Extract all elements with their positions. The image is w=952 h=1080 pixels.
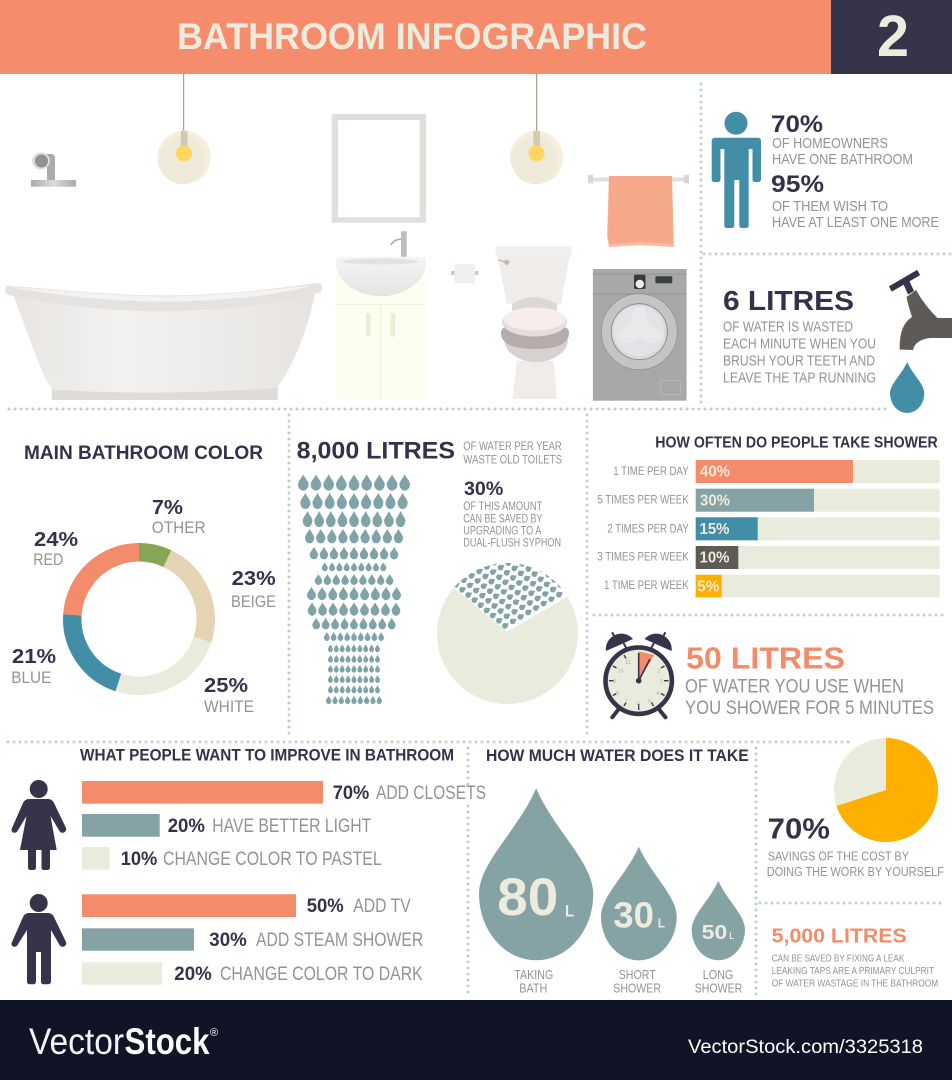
- icon: alarm clock: 10: [617, 668, 624, 674]
- label: other: OTHER: [152, 518, 206, 537]
- icon: alarm clock: 8: [616, 691, 619, 697]
- bar chart: 30%: [700, 492, 730, 509]
- bar chart: 1 TIME PER WEEK: [604, 580, 689, 592]
- bar chart: 10%: [700, 550, 730, 567]
- bar chart: women: 20%: [168, 816, 205, 837]
- label: red: 24%: [34, 529, 78, 551]
- bar chart: 3 TIMES PER WEEK: [597, 552, 689, 564]
- label: red: [33, 529, 78, 569]
- stat: 30 percent: UPGRADING TO A: [463, 525, 542, 537]
- icon: alarm clock: 6: [637, 702, 640, 708]
- bar chart: men: 50%: [307, 896, 344, 917]
- bar chart: 5 TIMES PER WEEK: [597, 495, 689, 507]
- text block: [723, 320, 876, 387]
- bar chart: men: ADD STEAM SHOWER: [256, 929, 423, 951]
- panel: 70 percent savings: [767, 738, 944, 879]
- stat: 70%: [768, 813, 830, 845]
- drop: long shower: [692, 881, 745, 996]
- label: blue: 21%: [12, 646, 56, 668]
- drop: long shower: SHOWER: [695, 981, 742, 996]
- drop: short shower: SHOWER: [613, 981, 661, 996]
- panel: how often do people take shower: [597, 435, 940, 597]
- stat: 70 percent: OF HOMEOWNERS: [772, 136, 888, 152]
- text block: [463, 439, 562, 466]
- heading: 6 LITRES: [723, 285, 854, 316]
- bathtub: [5, 283, 322, 400]
- label: white: [204, 675, 254, 716]
- stat: 30 percent: OF THIS AMOUNT: [463, 501, 542, 513]
- bathroom scene illustration: [5, 74, 689, 401]
- bar chart: women: [82, 781, 486, 870]
- drop: long shower: LONG: [703, 967, 733, 982]
- label: blue: BLUE: [11, 668, 51, 687]
- panel: 5,000 litres: [772, 925, 938, 989]
- pie chart: [834, 738, 938, 842]
- text block: BRUSH YOUR TEETH AND: [723, 354, 875, 370]
- icon: alarm clock: 3: [660, 679, 663, 685]
- image id: VectorStock.com/3325318: [688, 1037, 923, 1058]
- registered mark: ®: [210, 1027, 218, 1039]
- logo text: [29, 1021, 210, 1062]
- icon: person: [712, 112, 761, 228]
- bar chart: women: 10%: [121, 849, 157, 870]
- bar chart: men: 30%: [209, 930, 247, 951]
- bar chart: men: CHANGE COLOR TO DARK: [220, 963, 423, 985]
- stat: 70 percent: [771, 111, 913, 168]
- bar chart: women: 70%: [333, 783, 369, 804]
- towel on rail: [588, 175, 689, 247]
- bar chart: men: [82, 894, 423, 985]
- vanity unit with basin: [336, 231, 426, 399]
- washing machine: [593, 269, 687, 401]
- bar chart: women: ADD CLOSETS: [376, 782, 486, 804]
- title: BATHROOM INFOGRAPHIC: [177, 16, 647, 57]
- bar chart: women: CHANGE COLOR TO PASTEL: [163, 848, 382, 870]
- chart: toilet made of water drops: [298, 474, 410, 704]
- bar chart: 2 TIMES PER DAY: [607, 523, 689, 535]
- stat: 30 percent: DUAL-FLUSH SYPHON: [463, 537, 561, 549]
- heading: 5,000 LITRES: [772, 925, 907, 948]
- label: other: [152, 497, 206, 537]
- text block: CAN BE SAVED BY FIXING A LEAK: [772, 953, 904, 965]
- label: white: 25%: [204, 675, 248, 697]
- text block: EACH MINUTE WHEN YOU: [723, 337, 876, 353]
- toilet: [496, 246, 571, 399]
- label: beige: 23%: [232, 568, 276, 590]
- drop: short shower: [601, 847, 677, 996]
- toilet paper: [451, 264, 478, 283]
- icon: alarm clock: 11: [625, 660, 631, 666]
- pie chart with drops: [437, 563, 578, 704]
- page number: 2: [877, 4, 909, 69]
- drop: taking bath: 80: [497, 868, 558, 927]
- panel: homeowners statistics: [712, 111, 939, 231]
- drop: long shower: 50: [702, 921, 727, 944]
- text block: [685, 676, 934, 719]
- panel: 8,000 litres toilets: [297, 437, 580, 704]
- panel: what people want to improve: [11, 746, 486, 985]
- drop: short shower: SHORT: [619, 967, 656, 982]
- donut chart: [72, 552, 206, 686]
- drop: taking bath: TAKING: [514, 967, 553, 982]
- icon: alarm clock: 2: [657, 668, 661, 674]
- panel: 6 litres tap: [723, 270, 952, 413]
- icon: tap: [890, 270, 952, 350]
- footer watermark bar: [0, 1000, 952, 1080]
- heading: 8,000 LITRES: [297, 437, 455, 464]
- stat: 30 percent: 30%: [464, 479, 503, 500]
- bar chart: 1 TIME PER DAY: [613, 466, 689, 478]
- lamp left: [157, 74, 211, 184]
- heading: 50 LITRES: [686, 640, 845, 675]
- icon: man: [11, 894, 66, 984]
- stat: 95 percent: [771, 171, 939, 231]
- icon: alarm clock: 9: [613, 679, 616, 685]
- icon: alarm clock: 7: [625, 699, 628, 705]
- bar chart: women: HAVE BETTER LIGHT: [212, 815, 371, 837]
- label: red: RED: [33, 550, 63, 569]
- icon: alarm clock: [606, 633, 672, 717]
- stat: 70 percent: 70%: [771, 111, 823, 138]
- stat: 95 percent: OF THEM WISH TO: [772, 199, 888, 215]
- panel: how much water does it take: [479, 747, 749, 996]
- mirror: [332, 114, 426, 223]
- bar chart: men: 20%: [174, 964, 212, 985]
- label: beige: [231, 568, 276, 611]
- drop: short shower: L: [658, 916, 665, 931]
- panel: 50 litres shower: [606, 633, 934, 719]
- text block: [767, 848, 944, 879]
- heading: MAIN BATHROOM COLOR: [24, 443, 263, 464]
- text block: SAVINGS OF THE COST BY: [768, 848, 909, 863]
- header banner: [0, 0, 952, 74]
- shower head: [31, 152, 76, 187]
- drop: taking bath: L: [565, 902, 574, 921]
- heading: HOW MUCH WATER DOES IT TAKE: [486, 747, 749, 765]
- bar chart: 15%: [700, 521, 730, 538]
- bar chart: men: ADD TV: [353, 895, 411, 917]
- text block: OF WATER YOU USE WHEN: [685, 676, 904, 698]
- stat: 95 percent: 95%: [771, 171, 824, 198]
- text block: LEAVE THE TAP RUNNING: [723, 371, 876, 387]
- label: blue: [11, 646, 56, 687]
- stat: 30 percent: [463, 479, 561, 549]
- label: beige: BEIGE: [231, 592, 276, 611]
- logo text: Stock: [124, 1021, 210, 1062]
- stat: 70 percent: HAVE ONE BATHROOM: [772, 152, 913, 168]
- text block: WASTE OLD TOILETS: [463, 452, 562, 466]
- text block: OF WATER IS WASTED: [723, 320, 853, 336]
- bar chart: 40%: [700, 464, 730, 481]
- text block: [772, 953, 938, 989]
- drop: long shower: L: [729, 931, 734, 942]
- bar chart: 5%: [697, 578, 719, 595]
- label: white: WHITE: [204, 697, 254, 716]
- icon: woman: [11, 780, 66, 870]
- bar chart: [597, 460, 940, 597]
- panel: main bathroom color: [11, 443, 276, 716]
- icon: alarm clock: 4: [656, 691, 660, 697]
- logo text: Vector: [29, 1021, 124, 1062]
- icon: water drop: [890, 362, 924, 413]
- stat: 30 percent: CAN BE SAVED BY: [463, 513, 543, 525]
- text block: OF WATER PER YEAR: [463, 439, 562, 453]
- drop: taking bath: BATH: [519, 981, 547, 996]
- lamp right: [510, 74, 563, 184]
- label: other: 7%: [152, 497, 183, 519]
- drop: short shower: 30: [613, 895, 654, 936]
- drop: taking bath: [479, 788, 593, 996]
- heading: WHAT PEOPLE WANT TO IMPROVE IN BATHROOM: [80, 746, 454, 764]
- icon: alarm clock: 5: [648, 699, 651, 705]
